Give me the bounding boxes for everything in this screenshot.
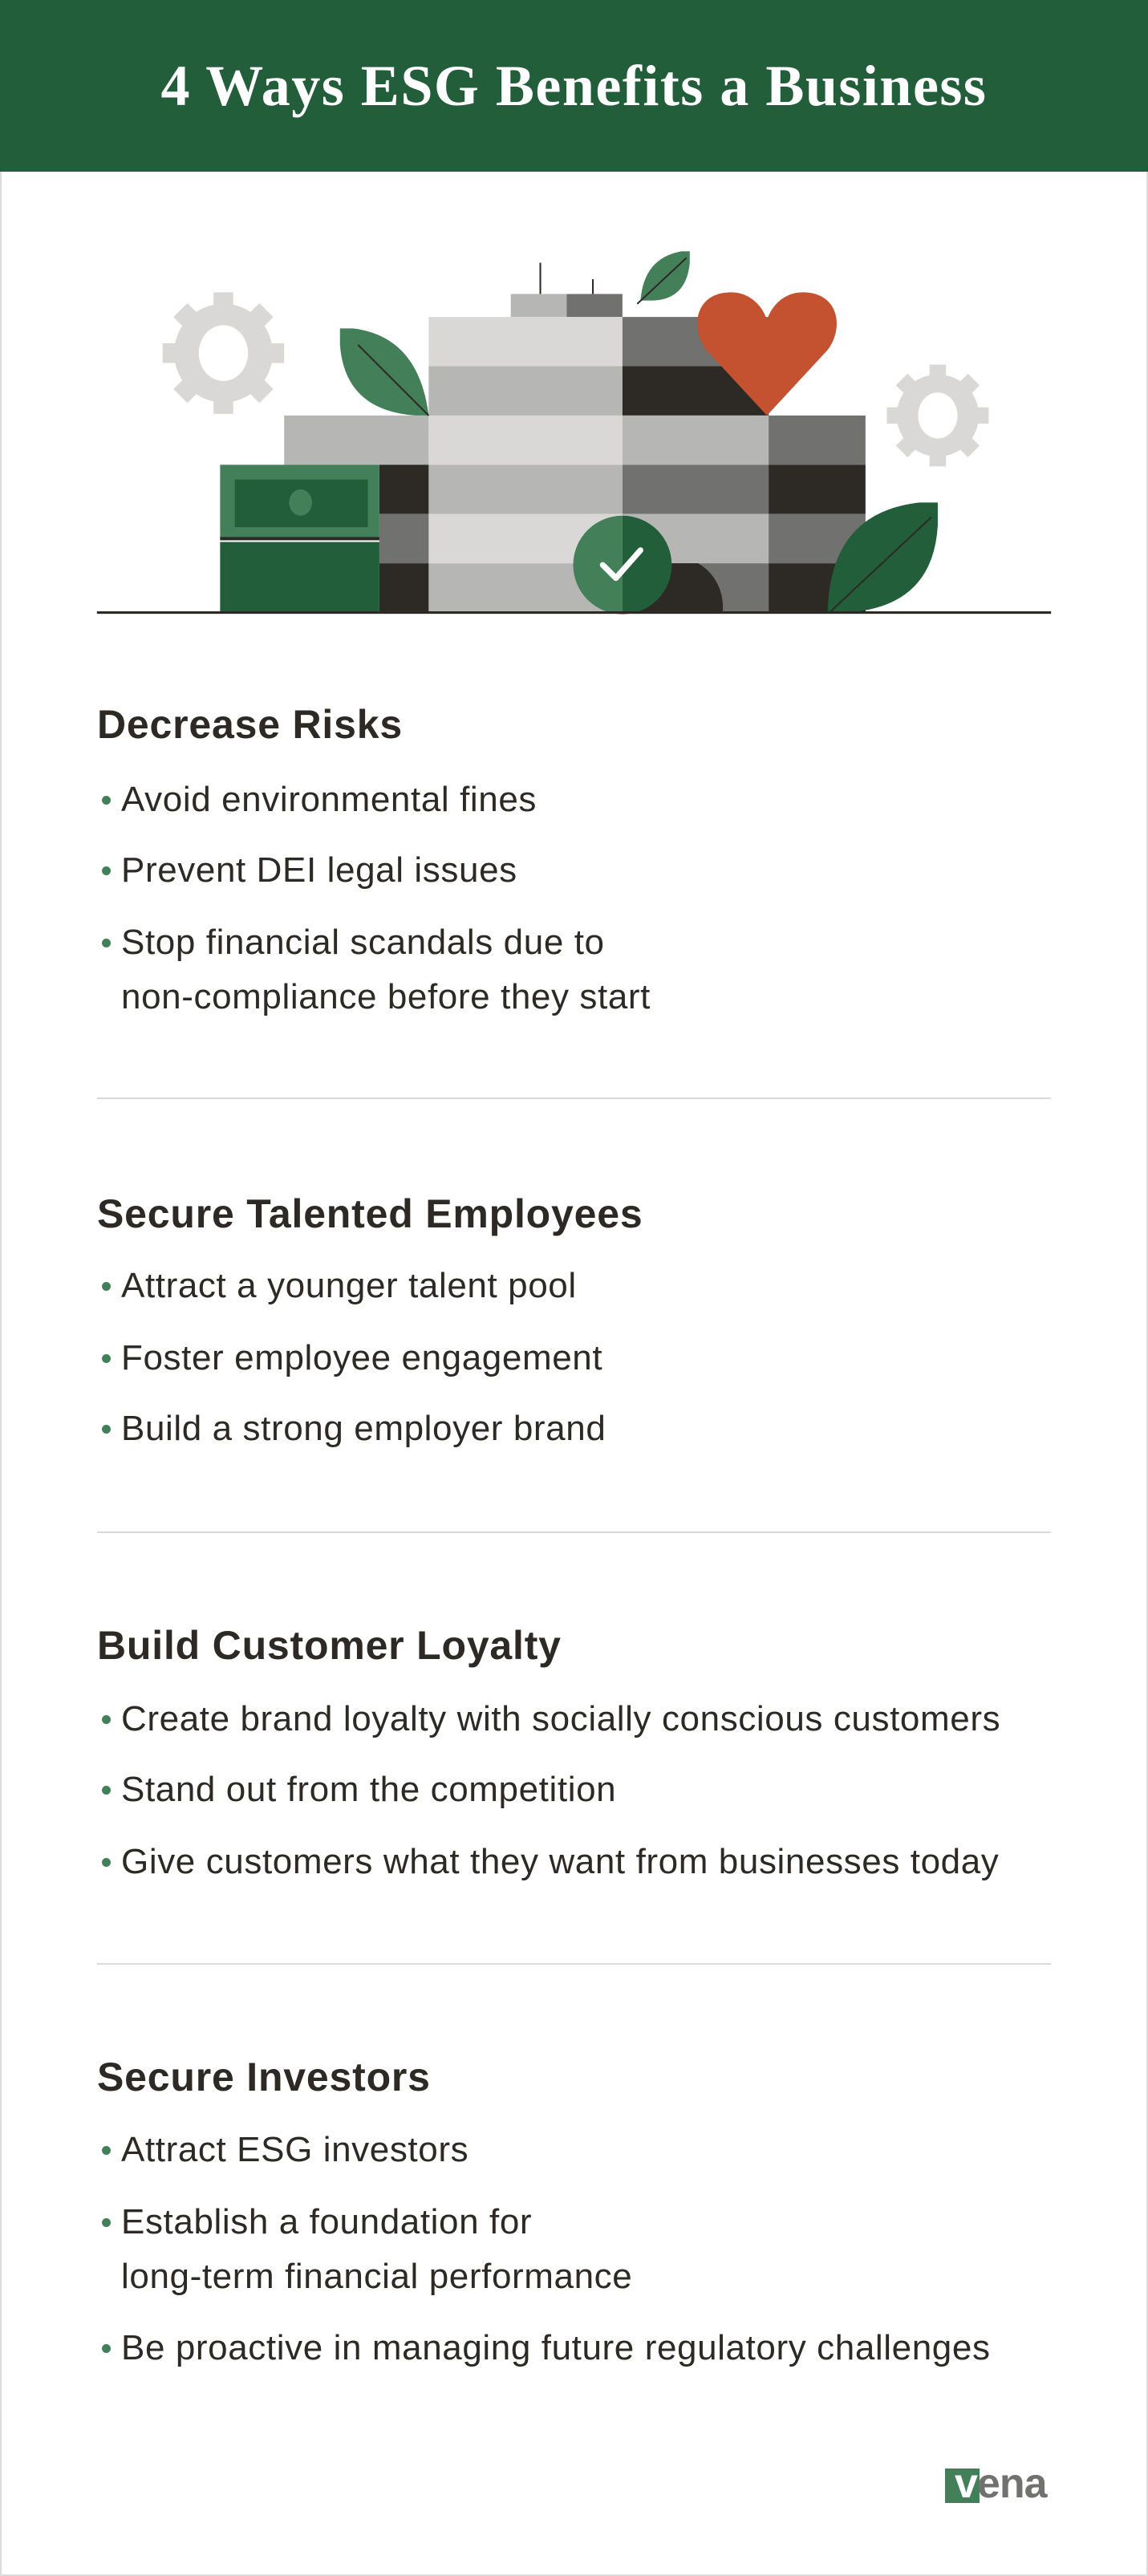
heading: Build Customer Loyalty	[97, 1623, 562, 1668]
section: secure talented employees	[97, 1191, 643, 1448]
bullet: Be proactive in managing future regulatory challenges	[121, 2328, 991, 2367]
bullet: Attract a younger talent pool	[121, 1266, 577, 1305]
bullet: Give customers what they want from businesses today	[121, 1842, 999, 1881]
bullet: Attract ESG investors	[121, 2130, 469, 2169]
section: secure investors	[97, 2055, 991, 2367]
heading: Decrease Risks	[97, 702, 403, 747]
bullet: long-term financial performance	[121, 2257, 632, 2296]
icon: left gear	[163, 292, 284, 414]
heading: Secure Talented Employees	[97, 1191, 643, 1236]
icon: leaves	[340, 251, 938, 613]
heading: Secure Investors	[97, 2055, 431, 2099]
bullet: non-compliance before they start	[121, 977, 651, 1016]
bullet: Create brand loyalty with socially conscious customers	[121, 1699, 1000, 1738]
bullet	[102, 923, 651, 1016]
bullet: Foster employee engagement	[121, 1338, 602, 1377]
title	[0, 0, 1148, 172]
section: build customer loyalty	[97, 1623, 1000, 1881]
bullet: Stop financial scandals due to	[121, 923, 605, 962]
icon: money	[220, 464, 379, 613]
building	[284, 263, 866, 613]
bullet: Avoid environmental fines	[121, 780, 537, 819]
illustration	[96, 251, 1051, 615]
icon: right gear	[886, 364, 988, 466]
icon: heart	[697, 292, 837, 416]
bullet	[102, 2202, 632, 2296]
bullet: Stand out from the competition	[121, 1770, 616, 1809]
bullet: Prevent DEI legal issues	[121, 850, 517, 890]
icon: check	[573, 516, 671, 615]
title: 4 Ways ESG Benefits a Business	[161, 54, 987, 118]
logo: vena: vena	[955, 2460, 1047, 2507]
bullet: Establish a foundation for	[121, 2202, 532, 2241]
bullet: Build a strong employer brand	[121, 1409, 606, 1448]
section: decrease risks	[97, 702, 651, 1016]
